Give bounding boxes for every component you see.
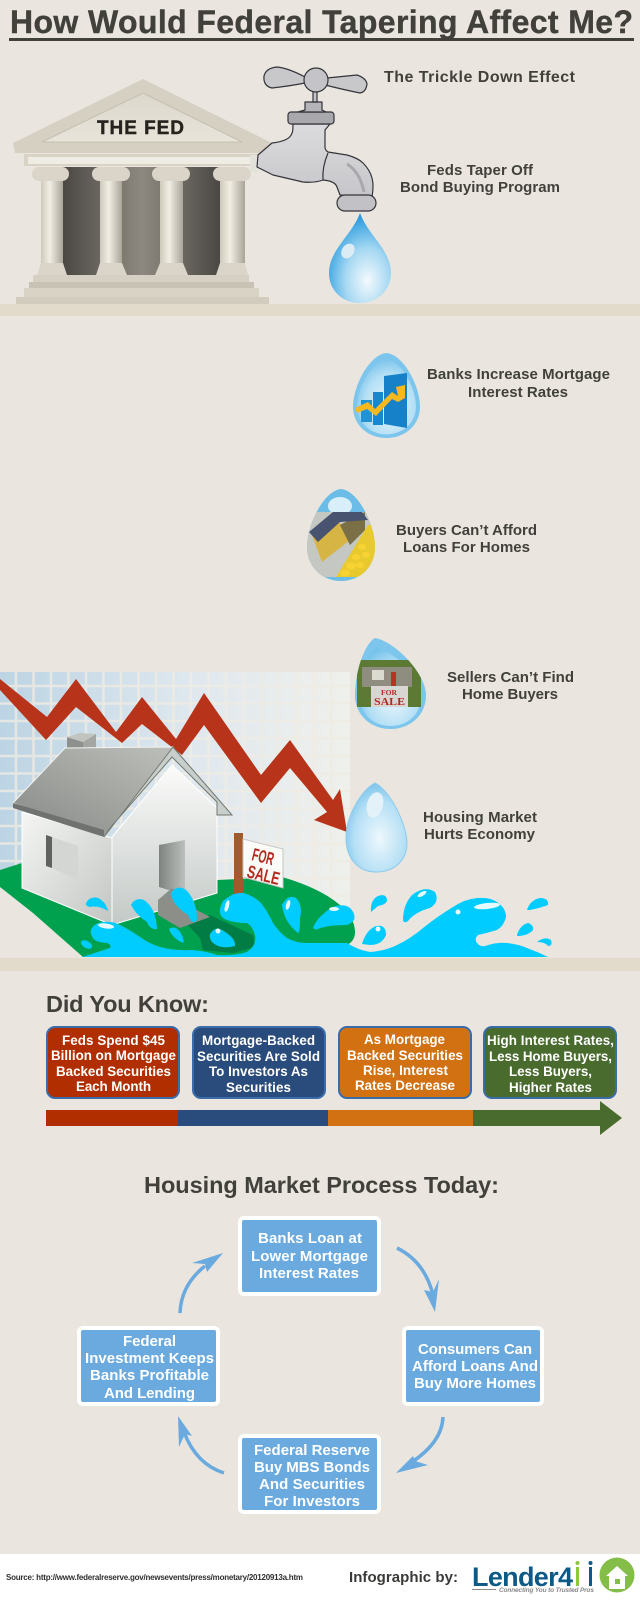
process box: federal investment: Federal [123,1333,176,1350]
infographic credit: Infographic by: [349,1569,458,1586]
text: sellers cannot find [447,669,574,703]
panel: fact 4: Less Buyers, [509,1064,592,1079]
process box: consumers: Consumers Can [418,1341,532,1358]
for sale sign: FOR [250,844,276,869]
panel: fact 2: To Investors As [209,1064,308,1079]
panel: fact 4: Higher Rates [509,1080,592,1095]
house [13,733,232,928]
ground [0,863,355,957]
panel: fact 3: Rates Decrease [355,1078,455,1093]
grid backdrop [0,672,350,957]
text: banks increase rates [427,366,610,401]
process box: consumers [404,1328,542,1404]
process box: federal reserve: And Securities [259,1476,365,1493]
source line: Source: http://www.federalreserve.gov/newsevents/press/monetary/20120913a.htm [6,1573,303,1582]
panel: fact 1 [47,1027,179,1098]
process box: banks loan: Lower Mortgage [251,1248,368,1265]
panel: fact 4: High Interest Rates, [487,1033,614,1048]
heading: housing market process: Housing Market Process Today: [144,1172,499,1198]
panel: fact 3: Backed Securities [347,1048,463,1063]
panel: fact 1: Backed Securities [56,1064,171,1079]
text: sellers cannot find: Home Buyers [462,686,558,703]
process box: banks loan [240,1218,379,1294]
panel: fact 2: Securities [226,1080,291,1095]
text: feds taper off: Feds Taper Off [427,162,534,179]
process box: federal reserve: Federal Reserve [254,1442,370,1459]
process box: federal investment: Investment Keeps [85,1350,214,1367]
water splash [80,888,552,957]
text: banks increase rates: Banks Increase Mortgage [427,366,610,383]
title: How Would Federal Tapering Affect Me? [10,4,633,40]
text: housing market hurts economy: Housing Market [423,809,537,826]
for sale sign [234,833,283,897]
divider band bottom [0,958,640,971]
process box: federal investment [79,1328,218,1404]
divider band top [0,304,640,316]
icon: drop with for sale house [355,638,426,729]
process box: consumers: Buy More Homes [414,1375,536,1392]
text: buyers cannot afford [396,522,537,556]
panel: fact 4: Less Home Buyers, [489,1049,612,1064]
text: housing market hurts economy [423,809,537,843]
building label: THE FED [97,118,184,139]
arrow: investment to banks [180,1253,223,1313]
timeline arrow bar [46,1101,622,1135]
text: feds taper off [400,162,560,196]
process box: federal investment: Banks Profitable [90,1367,209,1384]
process box: federal investment: And Lending [104,1385,195,1402]
logo: lender4 [472,1558,634,1594]
illustration: faucet [250,67,376,211]
text: sellers cannot find: Sellers Can’t Find [447,669,574,686]
lower left page corner [0,886,83,957]
panel: fact 2: Mortgage-Backed [202,1033,315,1048]
icon: drop with for sale house: FOR [381,689,398,697]
icon: drop with house and coins [307,489,375,581]
text: the trickle down effect: The Trickle Down Effect [384,69,576,86]
arrow: reserve to federal investment [178,1416,224,1473]
panel: fact 1: Each Month [76,1079,151,1094]
text: housing market hurts economy: Hurts Economy [424,826,536,843]
panel: fact 3: As Mortgage [364,1032,445,1047]
for sale sign: SALE [245,861,282,889]
process box: federal reserve: Buy MBS Bonds [254,1459,370,1476]
panel: fact 1: Billion on Mortgage [51,1048,176,1063]
panel: fact 1: Feds Spend $45 [62,1033,166,1048]
text: banks increase rates: Interest Rates [468,384,568,401]
panel: fact 4 [484,1027,616,1098]
text: buyers cannot afford: Buyers Can’t Afford [396,522,537,539]
process box: consumers: Afford Loans And [412,1358,538,1375]
arrow: loan to consumers [397,1248,439,1312]
illustration: the fed building [13,79,272,304]
footer strip [0,1554,640,1600]
process box: banks loan: Banks Loan at [258,1230,362,1247]
process box: banks loan: Interest Rates [259,1265,359,1282]
icon: pale falling drop [346,783,407,872]
heading: did you know: Did You Know: [46,991,209,1017]
panel: fact 2: Securities Are Sold [197,1049,320,1064]
arrow: consumers to federal reserve [396,1417,443,1473]
panel: fact 3: Rise, Interest [363,1063,449,1078]
water highlights [98,890,500,934]
text: buyers cannot afford: Loans For Homes [403,539,530,556]
logo: lender4: Lender4 [472,1562,573,1592]
declining red arrow [0,679,347,832]
process box: federal reserve [240,1436,379,1512]
panel: fact 3 [339,1027,471,1098]
text: feds taper off: Bond Buying Program [400,179,560,196]
process box: federal reserve: For Investors [264,1493,360,1510]
panel: fact 2 [193,1027,325,1098]
chart backdrop with declining arrow and flooded house [0,672,552,957]
icon: drop with bar chart [353,353,420,438]
icon: drop with for sale house: SALE [374,697,405,708]
icon: large water drop [329,213,391,303]
logo: lender4: Connecting You to Trusted Pros [499,1587,594,1594]
